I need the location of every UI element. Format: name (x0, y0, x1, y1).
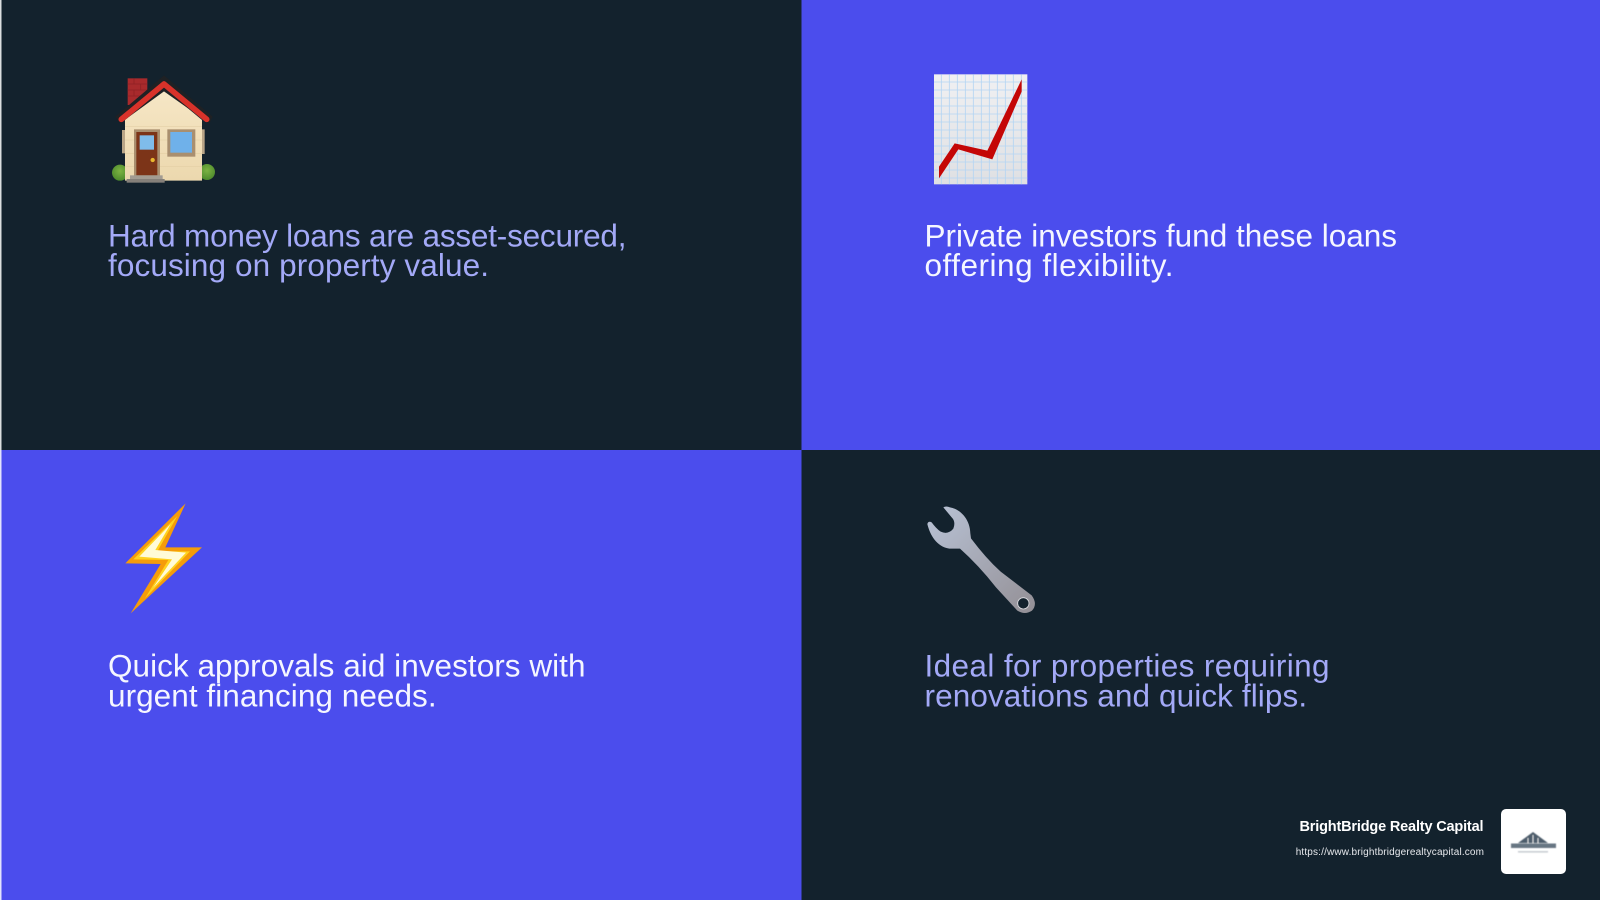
icon: lightning bolt (125, 503, 202, 613)
logo (1501, 809, 1566, 874)
panel: private investors (802, 0, 1600, 450)
text: renovations (924, 648, 1330, 714)
icon: chart (934, 74, 1027, 184)
text: quick approvals (108, 648, 586, 714)
text: asset-secured (108, 218, 626, 283)
brand url: https://www.brightbridgerealtycapital.com (1296, 847, 1484, 858)
text: quick approvals: urgent financing needs. (108, 678, 437, 714)
text: private investors: offering flexibility. (924, 247, 1174, 283)
text: renovations: renovations and quick flips. (924, 678, 1307, 714)
panel: renovations (802, 450, 1600, 900)
text: asset-secured: focusing on property value. (108, 247, 489, 283)
panel: asset-secured (0, 0, 802, 450)
text: private investors: Private investors fund these loans (924, 218, 1397, 254)
icon: house (112, 75, 215, 183)
text: quick approvals: Quick approvals aid investors with (108, 648, 586, 684)
icon: wrench (927, 506, 1035, 613)
text: renovations: Ideal for properties requiring (924, 648, 1330, 684)
text: private investors (924, 218, 1397, 283)
brand name: BrightBridge Realty Capital (1300, 819, 1484, 835)
text: asset-secured: Hard money loans are asset-secured, (108, 218, 626, 254)
panel: quick approvals (0, 450, 802, 900)
